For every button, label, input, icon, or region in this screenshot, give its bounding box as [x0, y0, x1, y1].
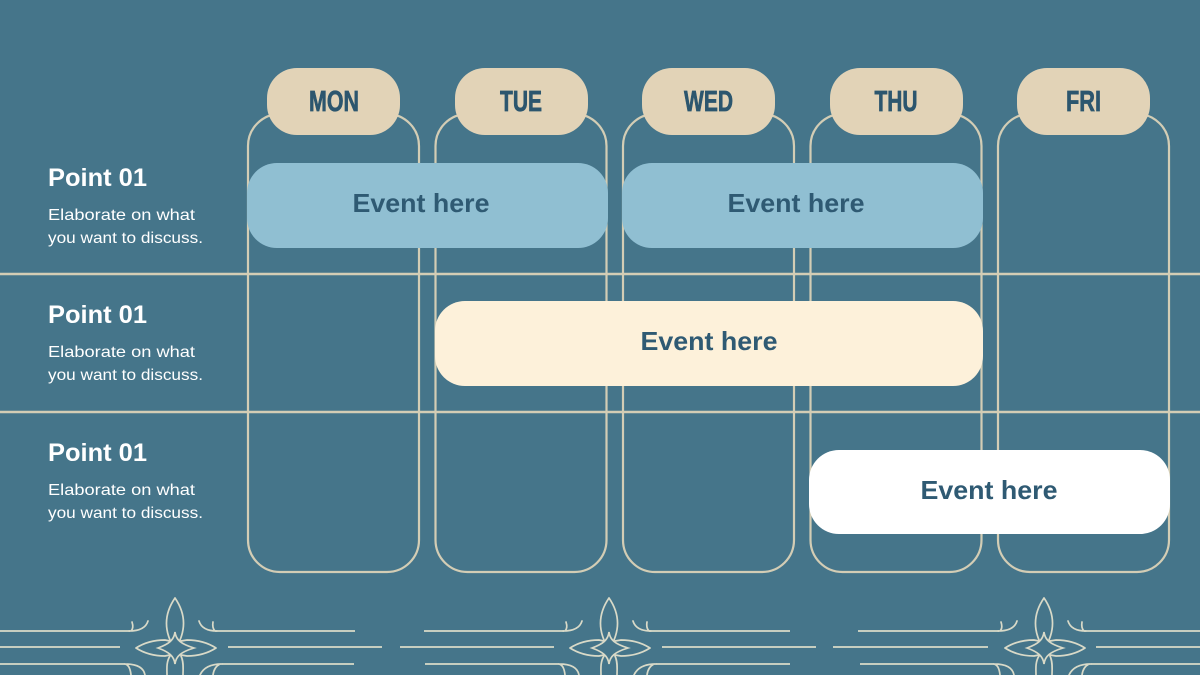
- day header: TUE: TUE: [500, 86, 542, 118]
- event bar: Thu-Fri: [809, 450, 1170, 534]
- day header: THU: [830, 68, 963, 135]
- row label 3: you want to discuss.: [48, 505, 203, 522]
- row label 3: Point 01: [48, 439, 147, 467]
- row label 1: Point 01: [48, 164, 147, 192]
- row label 3: [48, 439, 203, 522]
- decorative footer border: [0, 598, 1200, 675]
- day header: TUE: [455, 68, 588, 135]
- day header: WED: [642, 68, 775, 135]
- day header: WED: WED: [684, 86, 733, 118]
- day header: FRI: [1017, 68, 1150, 135]
- row label 1: Elaborate on what: [48, 207, 196, 224]
- day header: THU: THU: [874, 86, 918, 118]
- event bar: Tue-Thu: [435, 301, 983, 386]
- row label 2: you want to discuss.: [48, 367, 203, 384]
- row label 1: [48, 164, 203, 247]
- event bar: Mon-Tue: Event here: [352, 188, 490, 218]
- day header: MON: [267, 68, 400, 135]
- row label 1: you want to discuss.: [48, 230, 203, 247]
- event bar: Tue-Thu: Event here: [640, 326, 778, 356]
- row label 2: [48, 301, 203, 384]
- event bar: Mon-Tue: [247, 163, 608, 248]
- day column outlines: [248, 114, 1169, 572]
- row label 3: Elaborate on what: [48, 482, 196, 499]
- event bar: Thu-Fri: Event here: [920, 475, 1058, 505]
- day header: MON: MON: [309, 86, 359, 118]
- row label 2: Point 01: [48, 301, 147, 329]
- row label 2: Elaborate on what: [48, 344, 196, 361]
- event bar: Wed-Thu: [622, 163, 983, 248]
- event bar: Wed-Thu: Event here: [728, 188, 864, 218]
- day header: FRI: FRI: [1066, 86, 1101, 118]
- row divider lines: [0, 274, 1200, 412]
